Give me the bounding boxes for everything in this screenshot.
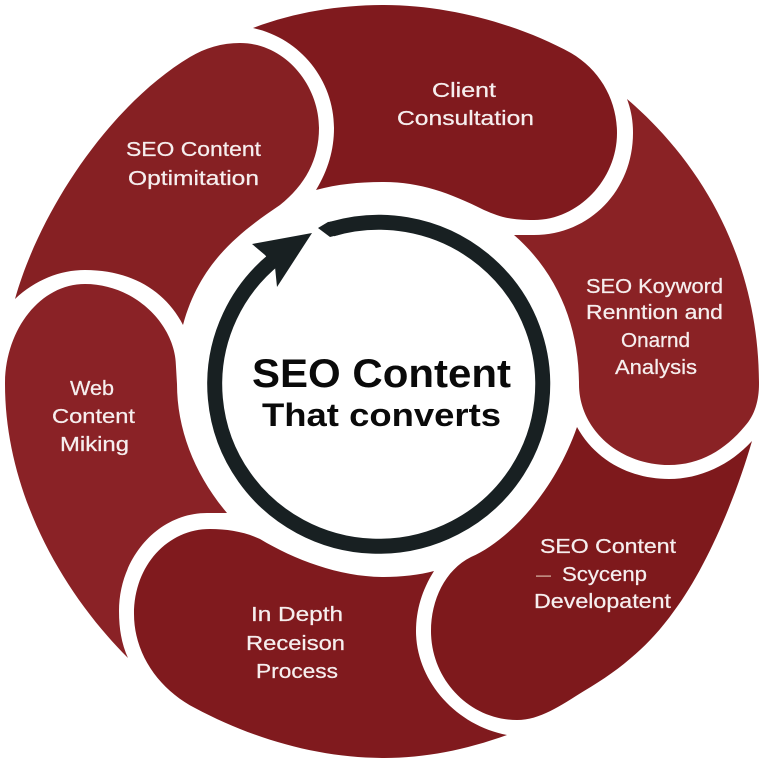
panel: In Depth Research Process: [134, 529, 507, 758]
panel: SEO Content Optimitation: [15, 43, 319, 325]
panel: Client Consultation: Client: [432, 79, 496, 102]
panel: SEO Keyword Analysis: [514, 99, 759, 465]
icon: circular arrow: [215, 221, 543, 546]
panel: SEO Content Development: Developatent: [534, 590, 671, 613]
panel: In Depth Research Process: In Depth: [251, 603, 343, 626]
panel: Client Consultation: Consultation: [397, 107, 534, 130]
panel: SEO Content Development: SEO Content: [540, 535, 676, 558]
panel: SEO Content Development: [431, 427, 752, 720]
panel: Client Consultation: [253, 5, 617, 220]
panel: SEO Content Development: Scycenp: [562, 563, 647, 586]
panel: Web Content Miking: Content: [52, 405, 135, 428]
panel: SEO Content Optimitation: Optimitation: [128, 167, 259, 190]
panel: SEO Keyword Analysis: SEO Koyword: [586, 275, 723, 298]
panel: SEO Keyword Analysis: Analysis: [615, 356, 697, 379]
center title: [252, 352, 511, 433]
panel: Web Content Miking: Miking: [60, 433, 129, 456]
panel: In Depth Research Process: Process: [256, 660, 338, 683]
panel: In Depth Research Process: Receison: [246, 632, 345, 655]
center title: SEO Content: [252, 352, 511, 396]
panel: SEO Keyword Analysis: Renntion and: [586, 301, 723, 324]
panel: Web Content Miking: Web: [70, 377, 114, 400]
panel: SEO Content Optimitation: SEO Content: [126, 138, 261, 161]
center title: That converts: [262, 397, 501, 433]
panel: Web Content Miking: [5, 284, 227, 658]
panel: SEO Keyword Analysis: Onarnd: [621, 329, 690, 352]
